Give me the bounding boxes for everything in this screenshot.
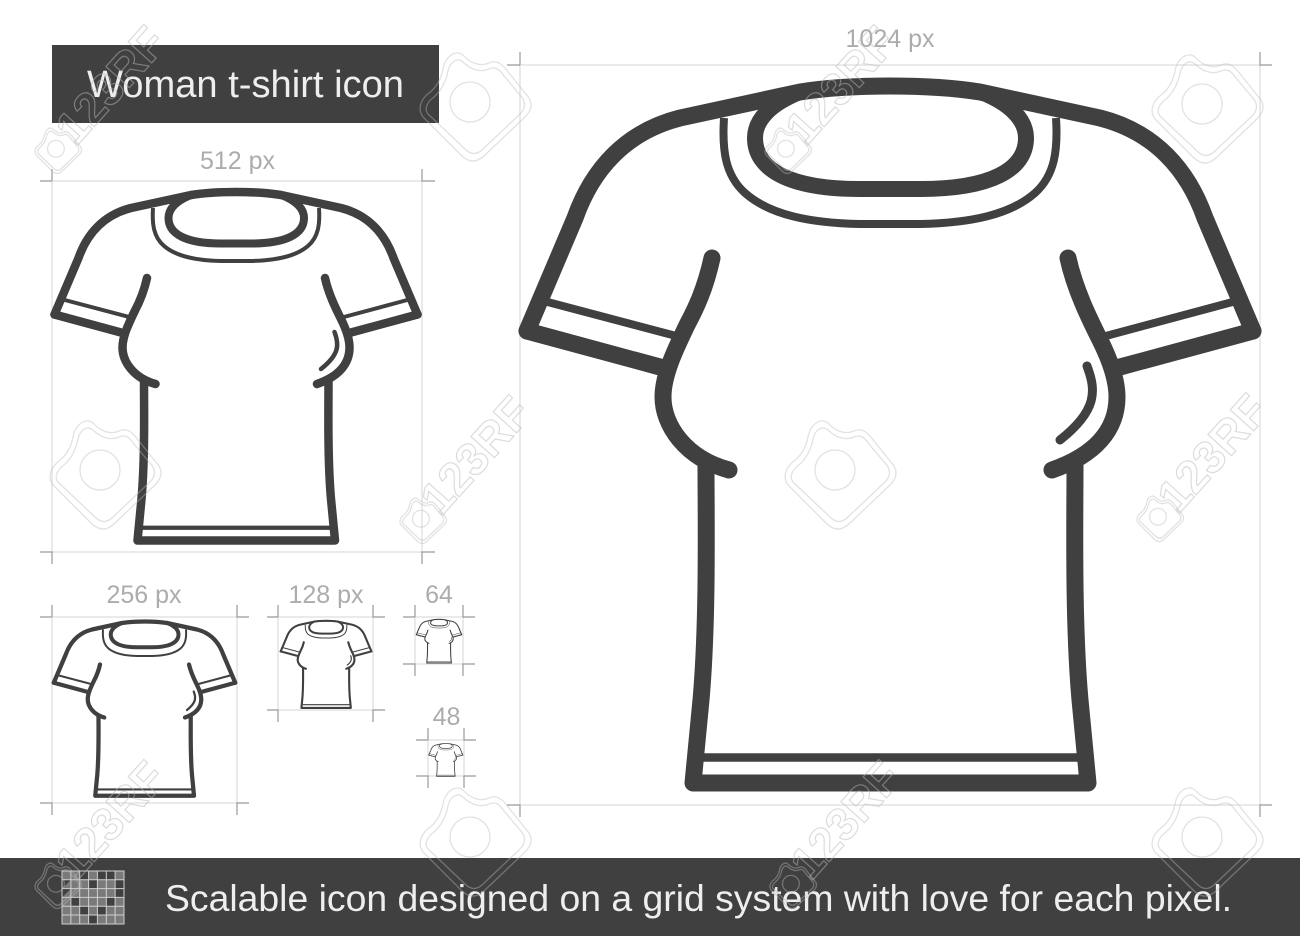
watermark overlay: 123RF xyxy=(775,16,906,154)
icon: pixel grid xyxy=(62,871,124,924)
title banner: Woman t-shirt icon xyxy=(87,64,404,106)
48 px icon panel: 48 xyxy=(433,703,460,731)
128 px icon panel xyxy=(267,581,385,722)
1024 px icon panel: 1024 px xyxy=(846,25,935,53)
64 px icon panel xyxy=(403,581,475,676)
watermark overlay: 123RF xyxy=(45,16,176,154)
128 px icon panel: 128 px xyxy=(288,581,364,609)
48 px icon panel xyxy=(416,703,476,788)
256 px icon panel: 256 px xyxy=(106,581,182,609)
watermark overlay: 123RF xyxy=(780,751,911,889)
512 px icon panel: 512 px xyxy=(200,147,276,175)
footer tagline: Scalable icon designed on a grid system with love for each pixel. xyxy=(165,878,1232,919)
footer bar xyxy=(0,858,1300,936)
256 px icon panel xyxy=(40,581,249,815)
watermark overlay: 123RF xyxy=(1147,384,1278,522)
64 px icon panel: 64 xyxy=(425,581,453,609)
512 px icon panel xyxy=(40,147,435,564)
title banner xyxy=(52,45,439,123)
watermark overlay: 123RF xyxy=(410,386,541,524)
watermark overlay: 123RF xyxy=(45,751,176,889)
